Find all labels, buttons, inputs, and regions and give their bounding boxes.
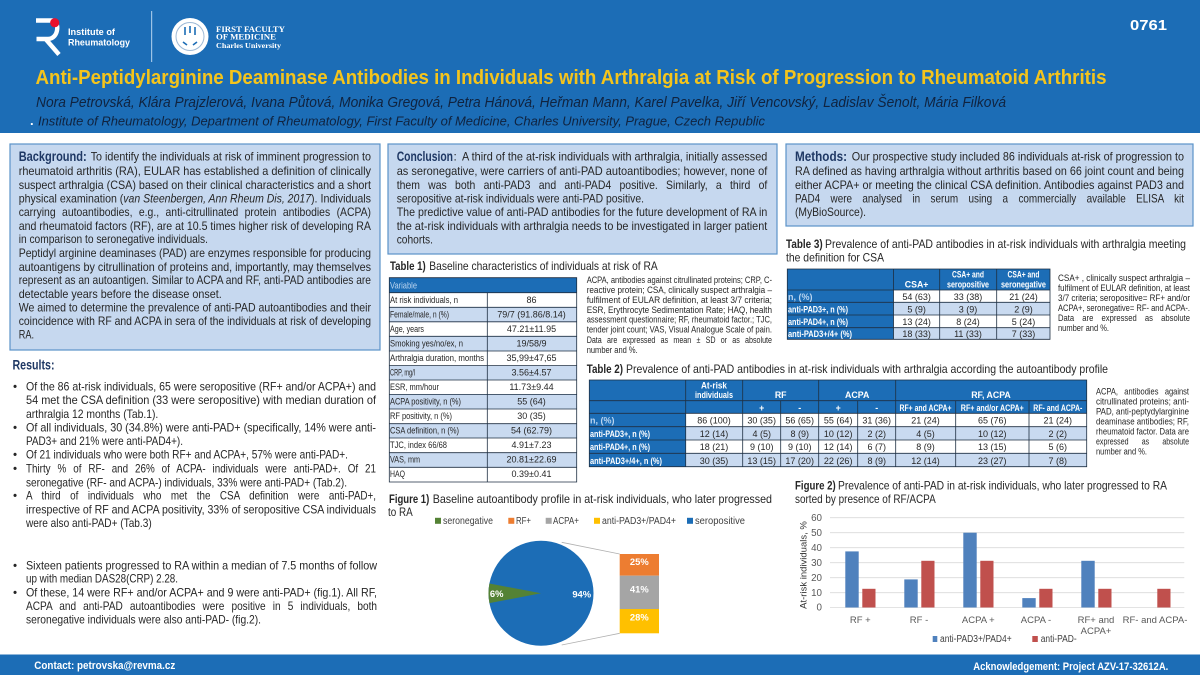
table 3: prevalence in CSA: 8 (24) (956, 317, 980, 327)
bars: anti-PAD- (862, 561, 1170, 608)
table 3: prevalence in CSA: seropositive (947, 280, 989, 290)
table 3: prevalence in CSA: 13 (24) (902, 317, 931, 327)
table 2: prevalence by autoantibody profile: 30 (35) (747, 416, 776, 426)
table 1: baseline characteristics: CRP, mg/l (390, 366, 415, 378)
footer band (0, 654, 1200, 675)
category labels: ACPA + (962, 615, 995, 626)
table 2 heading: Prevalence of anti-PAD antibodies in at-risk individuals with arthralgia according the autoantibody profile (626, 362, 1108, 376)
figure 1 heading (388, 492, 772, 519)
table 1: baseline characteristics: Arthralgia duration, months (390, 352, 484, 363)
table 2: prevalence by autoantibody profile: RF+ and ACPA+ (900, 403, 952, 413)
figure 2 heading (795, 478, 1167, 506)
legend: anti-PAD3+/PAD4+ (940, 634, 1012, 645)
table 3 footnote (1058, 273, 1190, 333)
table 1: baseline characteristics: 11.73±9.44 (509, 382, 554, 392)
table 2: prevalence by autoantibody profile: 31 (36) (862, 416, 891, 426)
panel: background: carrying autoantibodies, e.g., anti-citrullinated protein antibodies (ACPA) (19, 206, 371, 219)
results text block: Of the 86 at-risk individuals, 65 were seropositive (RF+ and/or ACPA+) and (26, 380, 376, 393)
bars: anti-PAD3+/PAD4+ (845, 533, 1095, 608)
logo: First Faculty of Medicine: FIRST FACULTY (216, 25, 285, 34)
results text block: irrespective of RF and ACPA positivity, 33% of seropositive CSA individuals (26, 503, 376, 516)
y axis labels: 0 (817, 602, 823, 614)
table 2: prevalence by autoantibody profile: 12 (14) (700, 429, 728, 439)
panel: conclusion: as seronegative, were carriers of anti-PAD autoantibodies; however, none of (397, 165, 768, 178)
figure 1 heading: Figure 1) (389, 492, 429, 506)
table 1 footnote: fulfilment of EULAR definition, at least 3/7 criteria; (587, 295, 772, 305)
table 1: baseline characteristics: 86 (526, 295, 537, 305)
panel: background: suspect arthralgia (CSA) based on their clinical characteristics and a short (19, 179, 372, 192)
panel: conclusion: the at-risk individuals with arthralgia needs to be investigated in larger patient (397, 220, 768, 233)
legend: anti-PAD3+/PAD4+ (602, 516, 676, 527)
results text block: ACPA and anti-PAD autoantibodies were positive in 5 individuals, both (26, 600, 377, 613)
table 1: baseline characteristics: Age, years (390, 323, 424, 334)
table 2: prevalence by autoantibody profile: + (836, 403, 841, 413)
table 2: prevalence by autoantibody profile: - (875, 403, 878, 413)
table 1: baseline characteristics: RF positivity, n (%) (390, 410, 452, 421)
legend (933, 634, 1077, 645)
table 1: baseline characteristics: 0.39±0.41 (512, 469, 551, 479)
table 2: prevalence by autoantibody profile: RF (775, 390, 787, 400)
table 2: prevalence by autoantibody profile: 9 (10) (750, 442, 773, 452)
figure 2: bar chart (798, 513, 1187, 645)
category labels: RF - (910, 615, 928, 626)
panel: background: detectable years before the disease onset. (19, 288, 222, 301)
table 2: prevalence by autoantibody profile: 13 (15) (978, 442, 1007, 452)
table 1: baseline characteristics: 47.21±11.95 (507, 324, 556, 334)
table 1 footnote: reactive protein; CSA, clinically suspect arthralgia – (587, 285, 772, 295)
results text block: Thirty % of RF- and 26% of ACPA- individuals were anti-PAD+. Of 21 (26, 462, 376, 475)
table 2: prevalence by autoantibody profile: 7 (8) (1049, 456, 1067, 466)
results text block: seronegative individuals were also anti-PAD- (fig.2). (26, 614, 261, 627)
category labels: RF + (850, 615, 871, 626)
heading: methods: Methods: (795, 149, 847, 164)
pie: 94% (572, 588, 592, 600)
logo: First Faculty of Medicine (172, 18, 285, 55)
table 1 footnote (587, 275, 772, 355)
header band (0, 0, 1200, 133)
logo: First Faculty of Medicine: OF MEDICINE (216, 32, 276, 42)
results text block: arthralgia 12 months (Tab.1). (26, 408, 158, 421)
results text block: • (13, 586, 17, 599)
legend: RF+ (516, 516, 531, 527)
affiliation: . (30, 113, 34, 128)
table 3: prevalence in CSA: 7 (33) (1012, 329, 1035, 339)
table 1 heading: Table 1) (390, 259, 426, 273)
panel: conclusion: seropositive at-risk individuals were anti-PAD positive. (397, 192, 644, 206)
table 2: prevalence by autoantibody profile: 12 (14) (911, 456, 940, 466)
table 3: prevalence in CSA: 18 (33) (902, 329, 931, 339)
table 2: prevalence by autoantibody profile: 10 (12) (978, 429, 1007, 439)
table 2: prevalence by autoantibody profile: 5 (6) (1049, 442, 1067, 452)
table 2: prevalence by autoantibody profile: 9 (10) (788, 442, 811, 452)
table 2: prevalence by autoantibody profile: 21 (24) (1044, 416, 1072, 426)
table 2: prevalence by autoantibody profile: 4 (5) (916, 429, 935, 439)
table 1 heading: Baseline characteristics of individuals at risk of RA (429, 259, 658, 273)
results text block: Of 21 individuals who were both RF+ and ACPA+, 57% were anti-PAD+. (26, 449, 348, 462)
table 3 footnote: CSA+ , clinically suspect arthralgia – (1058, 273, 1190, 283)
figure 1 heading: to RA (388, 505, 413, 519)
breakdown stack: 41% (630, 584, 649, 594)
table 1: baseline characteristics: 30 (35) (517, 411, 546, 421)
table 3: prevalence in CSA: 2 (9) (1014, 304, 1033, 314)
table 2: prevalence by autoantibody profile: 12 (14) (824, 442, 852, 452)
table 1: baseline characteristics: 20.81±22.69 (507, 454, 556, 464)
results text block: • (13, 462, 17, 475)
table 2: prevalence by autoantibody profile: 4 (5) (752, 429, 771, 439)
table 3: prevalence in CSA (787, 269, 1050, 339)
results text block: • (13, 421, 17, 434)
table 2: prevalence by autoantibody profile: 2 (2) (1049, 429, 1067, 439)
panel: background: ). Individuals (311, 192, 371, 206)
results text block: • (13, 559, 17, 572)
panel: background: Peptidyl arginine deaminases (PAD) are enzymes responsible for producing (19, 247, 371, 260)
table 2 footnote: PAD, anti-peptydylarginine (1096, 407, 1189, 417)
table 2 footnote: deaminase antibodies; RF, (1096, 417, 1189, 427)
table 1: baseline characteristics: ESR, mm/hour (390, 381, 439, 392)
table 3: prevalence in CSA: anti-PAD3+, n (%) (788, 304, 848, 314)
table 2: prevalence by autoantibody profile: At-risk (701, 380, 727, 390)
table 2: prevalence by autoantibody profile: RF- and ACPA- (1033, 403, 1082, 413)
y axis labels: 30 (811, 558, 823, 569)
y axis labels: 10 (811, 588, 823, 599)
table 2: prevalence by autoantibody profile: 8 (9) (790, 429, 809, 439)
table 2: prevalence by autoantibody profile: 30 (35) (700, 456, 728, 466)
table 3 footnote: 3/7 criteria; seropositive= RF+ and/or (1058, 293, 1190, 303)
table 2: prevalence by autoantibody profile (589, 380, 1087, 467)
table 2: prevalence by autoantibody profile: 55 (64) (824, 416, 852, 426)
table 1 footnote: assessment questionnaire; RF, rheumatoid factor.; TJC, (587, 314, 772, 324)
table 1: baseline characteristics: 55 (64) (517, 396, 546, 406)
table 2: prevalence by autoantibody profile: ACPA (845, 390, 870, 400)
results text block: seronegative (RF- and ACPA-) individuals, 33% were anti-PAD+ (Tab.2). (26, 476, 347, 489)
results text block: • (13, 490, 17, 503)
table 3: prevalence in CSA: 5 (24) (1012, 317, 1035, 327)
table 3 heading (786, 237, 1186, 264)
table 2: prevalence by autoantibody profile: 22 (26) (824, 456, 852, 466)
breakdown stack: 28% (630, 612, 649, 622)
y axis title: At-risk individuals, % (798, 521, 810, 609)
category labels: RF- and ACPA- (1123, 615, 1187, 626)
panel: background: To identify the individuals at risk of imminent progression to (91, 150, 371, 164)
table 1: baseline characteristics: Variable (390, 280, 417, 290)
results text block: Sixteen patients progressed to RA within a median of 7.5 months of follow (26, 559, 378, 572)
category labels: RF+ and (1078, 615, 1114, 626)
table 2: prevalence by autoantibody profile: RF, ACPA (971, 390, 1011, 400)
table 2: prevalence by autoantibody profile: anti-PAD3+/4+, n (%) (590, 456, 662, 466)
table 3: prevalence in CSA: n, (%) (788, 292, 812, 302)
results text block: • (13, 380, 17, 393)
panel: background: and rheumatoid factors (RF), are at 10.5 times higher risk of developing RA (19, 220, 371, 233)
table 2: prevalence by autoantibody profile: 18 (21) (700, 442, 728, 452)
legend: ACPA+ (553, 516, 579, 527)
legend (435, 516, 746, 527)
table 2: prevalence by autoantibody profile: 8 (9) (867, 456, 886, 466)
table 1: baseline characteristics: 35,99±47,65 (507, 353, 556, 363)
table 1: baseline characteristics: 4.91±7.23 (512, 440, 551, 450)
table 1: baseline characteristics: 3.56±4.57 (512, 368, 551, 378)
y axis labels: 40 (811, 543, 823, 554)
table 2: prevalence by autoantibody profile: 21 (24) (911, 416, 940, 426)
panel: background: represent as an autoantigen. Similar to ACPA and RF, anti-PAD antibodies are (19, 274, 371, 287)
poster number: 0761 (1130, 18, 1167, 34)
table 2: prevalence by autoantibody profile: 23 (27) (978, 456, 1007, 466)
panel: conclusion: A third of the at-risk individuals with arthralgia, initially assessed (462, 150, 767, 164)
y axis labels: 60 (811, 513, 823, 524)
header band: Institute of Rheumatology, Department of Rheumatology, First Faculty of Medicine, Charles University, Prague, Czech Republic (38, 114, 765, 128)
table 2: prevalence by autoantibody profile: 6 (7) (867, 442, 886, 452)
panel: conclusion (388, 144, 777, 254)
panel: background: We aimed to determine the prevalence of anti-PAD autoantibodies and their (19, 302, 371, 314)
pie: 6% (490, 588, 504, 599)
table 2 footnote: citrullinated proteins; anti- (1096, 397, 1189, 407)
table 2: prevalence by autoantibody profile: - (798, 403, 801, 413)
table 1: baseline characteristics: Smoking yes/no/ex, n (390, 338, 463, 348)
table 3: prevalence in CSA: CSA+ (905, 280, 928, 290)
results text block (12, 358, 378, 627)
heading: results: Results: (12, 358, 54, 372)
table 2: prevalence by autoantibody profile: 86 (100) (697, 416, 731, 426)
results text block: PAD3+ and 21% were anti-PAD4+). (26, 435, 183, 448)
category labels (850, 615, 1187, 637)
logo: Institute of Rheumatology (36, 18, 130, 55)
acknowledgement: Acknowledgement: Project AZV-17-32612A. (973, 661, 1168, 673)
table 2: prevalence by autoantibody profile: anti-PAD3+, n (%) (590, 429, 650, 439)
table 3 footnote: number and %. (1058, 323, 1109, 333)
connector lines (562, 542, 620, 645)
figure 1: pie chart with breakdown stack (435, 516, 746, 646)
table 1 footnote: ACPA, antibodies against citrullinated proteins; CRP, C- (587, 275, 772, 285)
table 2: prevalence by autoantibody profile: 17 (20) (785, 456, 814, 466)
results text block: Of all individuals, 30 (34.8%) were anti-PAD+ (specifically, 14% were anti- (26, 421, 376, 434)
results text block: were also anti-PAD+ (Tab.3) (25, 517, 152, 530)
table 1: baseline characteristics: ACPA positivity, n (%) (390, 396, 461, 406)
category labels: ACPA+ (1081, 626, 1112, 637)
legend: seronegative (443, 516, 493, 527)
table 2: prevalence by autoantibody profile: 2 (2) (867, 429, 886, 439)
panel: background: coincidence with RF and ACPA in sera of the individuals at risk of developing (19, 315, 371, 328)
table 2: prevalence by autoantibody profile: 8 (9) (916, 442, 935, 452)
y axis labels: 50 (811, 528, 823, 539)
results text block: up with median DAS28(CRP) 2.28. (26, 573, 178, 586)
table 3: prevalence in CSA: 54 (63) (902, 292, 931, 302)
table 3: prevalence in CSA: CSA+ and (1008, 270, 1040, 280)
table 1 footnote: number and %. (587, 345, 638, 355)
y axis labels (811, 513, 823, 614)
panel: conclusion: The predictive value of anti-PAD antibodies for the future development of RA in (397, 206, 767, 219)
table 2 footnote: rheumatoid factor. Data are (1096, 427, 1189, 437)
table 3: prevalence in CSA: 3 (9) (959, 304, 977, 314)
table 2: prevalence by autoantibody profile: 10 (12) (824, 429, 852, 439)
legend: seropositive (695, 516, 746, 527)
table 1 footnote: tender joint count; VAS, Visual Analogue Scale of pain. (587, 324, 772, 334)
heading: conclusion: Conclusion (397, 149, 453, 164)
legend: anti-PAD- (1041, 634, 1077, 645)
breakdown stack (620, 554, 659, 633)
table 3: prevalence in CSA: 21 (24) (1009, 292, 1038, 302)
logo: Institute of Rheumatology: Institute of (68, 27, 116, 37)
table 2: prevalence by autoantibody profile: + (759, 403, 764, 413)
table 2 heading: Table 2) (587, 362, 623, 376)
table 2 footnote: number and %. (1096, 447, 1147, 457)
table 3: prevalence in CSA: anti-PAD4+, n (%) (788, 317, 848, 327)
contact: Contact: petrovska@revma.cz (34, 660, 176, 672)
panel: conclusion: cohorts. (397, 233, 433, 246)
figure 1 heading: Baseline autoantibody profile in at-risk individuals, who later progressed (433, 492, 772, 506)
logo: Institute of Rheumatology: Rheumatology (68, 38, 130, 48)
results text block: A third of individuals who met the CSA definition were anti-PAD+, (26, 490, 376, 503)
panel: conclusion: them was both anti-PAD3 and anti-PAD4 positive. Similarly, a third of (397, 179, 768, 192)
table 2: prevalence by autoantibody profile: 56 (65) (785, 416, 814, 426)
panel: background: rheumatoid arthritis (RA), EULAR has established a definition of clinically (19, 165, 371, 178)
table 1 footnote: ESR, Erythrocyte Sedimentation Rate; HAQ, health (587, 305, 772, 315)
table 2 footnote (1096, 387, 1189, 457)
table 1: baseline characteristics: Female/male, n (%) (390, 308, 449, 320)
panel: conclusion: : (454, 150, 457, 164)
figure 2 heading: sorted by presence of RF/ACPA (795, 492, 936, 506)
table 3: prevalence in CSA: CSA+ and (952, 270, 984, 280)
table 1 footnote: Data are expressed as mean ± SD or as absolute (587, 335, 772, 345)
table 3: prevalence in CSA: seronegative (1001, 280, 1046, 290)
table 3: prevalence in CSA: anti-PAD3+/4+ (%) (788, 329, 852, 339)
panel: background: van Steenbergen, Ann Rheum Dis, 2017 (123, 192, 311, 206)
table 3: prevalence in CSA: 11 (33) (954, 329, 982, 339)
table 2: prevalence by autoantibody profile: RF+ and/or ACPA+ (961, 403, 1024, 413)
table 2: prevalence by autoantibody profile: anti-PAD4+, n (%) (590, 442, 650, 452)
table 2: prevalence by autoantibody profile: individuals (695, 390, 733, 400)
authors: Nora Petrovská, Klára Prajzlerová, Ivana Půtová, Monika Gregová, Petra Hánová, Heřman Mann, Karel Pavelka, Jiří Vencovský, Ladislav Šenolt, Mária Filková (36, 94, 1006, 111)
heading: background: Background: (19, 149, 87, 164)
panel: background: autoantigens by citrullination of proteins and, importantly, may themselves (19, 261, 371, 274)
results text block: 54 met the CSA definition (33 were seropositive) with median duration of (26, 394, 377, 407)
category labels: ACPA - (1021, 615, 1051, 626)
results text block: Of these, 14 were RF+ and/or ACPA+ and 9 were anti-PAD+ (fig.1). All RF, (26, 586, 377, 599)
table 1: baseline characteristics: 54 (62.79) (511, 426, 552, 436)
y axis labels: 20 (811, 573, 823, 584)
results text block: • (13, 449, 17, 462)
table 1: baseline characteristics: 19/58/9 (516, 338, 547, 348)
table 3: prevalence in CSA: 33 (38) (954, 292, 982, 302)
table 2: prevalence by autoantibody profile: 65 (76) (978, 416, 1007, 426)
table 2: prevalence by autoantibody profile: n, (%) (590, 416, 614, 426)
panel: background: in comparison to seronegative individuals. (19, 233, 208, 246)
table 1: baseline characteristics: TJC, index 66/68 (390, 439, 447, 450)
table 1: baseline characteristics: At risk individuals, n (390, 294, 458, 305)
table 1: baseline characteristics: 79/7 (91.86/8.14) (497, 310, 566, 320)
panel: background: physical examination ( (19, 192, 123, 206)
table 1: baseline characteristics (389, 278, 577, 482)
figure 2 heading: Figure 2) (795, 478, 836, 492)
pie (488, 541, 594, 646)
title: Anti-Peptidylarginine Deaminase Antibodies in Individuals with Arthralgia at Risk of Progression to Rheumatoid Arthritis (36, 67, 1106, 89)
table 1: baseline characteristics: HAQ (390, 468, 405, 479)
panel: methods: (MyBioSource). (795, 206, 866, 219)
panel: methods (786, 144, 1193, 226)
table 3: prevalence in CSA: 5 (9) (907, 304, 926, 314)
table 3 heading: the definition for CSA (786, 250, 884, 264)
panel: background (10, 144, 380, 350)
table 1: baseline characteristics: VAS, mm (390, 454, 420, 464)
logo: First Faculty of Medicine: Charles University (216, 41, 281, 50)
table 1: baseline characteristics: CSA definition, n (%) (390, 424, 459, 436)
table 3 heading: Table 3) (786, 237, 823, 251)
panel: background: RA. (19, 328, 34, 342)
table 2: prevalence by autoantibody profile: 13 (15) (747, 456, 776, 466)
breakdown stack: 25% (630, 556, 649, 567)
